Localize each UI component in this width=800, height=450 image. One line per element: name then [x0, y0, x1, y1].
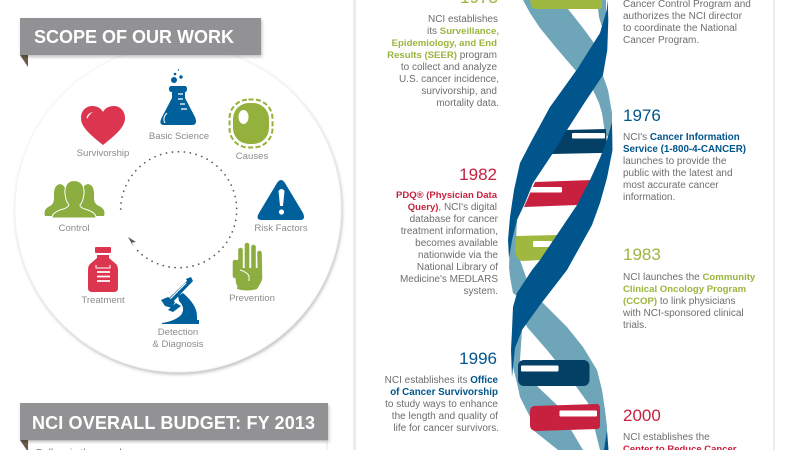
timeline: 1996: the length and quality of [392, 411, 498, 422]
timeline: 1982: becomes available [415, 238, 498, 249]
rung: red upper [524, 180, 592, 207]
timeline: 1996: 1996 [459, 349, 497, 368]
timeline: national cancer program: to coordinate the National [623, 23, 737, 34]
timeline: 1973: survivorship, and [421, 86, 497, 97]
timeline: 1976: public with the latest and [623, 168, 733, 179]
label: treatment: Treatment [81, 295, 125, 306]
label: control: Control [59, 223, 89, 234]
timeline: 1982: Medicine's MEDLARS [400, 274, 498, 285]
cycle arrow [121, 152, 237, 268]
timeline: 1976: 1976 [623, 106, 661, 125]
timeline: 1983: (CCOP) to link physicians [623, 296, 735, 307]
timeline: 1973: its Surveillance, [427, 26, 499, 37]
timeline: 1982: system. [464, 286, 498, 297]
timeline: 1982 [396, 165, 499, 297]
timeline: 1982: Query), NCI's digital [408, 202, 497, 213]
strand: light middle left [509, 220, 530, 300]
icon: survivorship heart [81, 106, 125, 145]
label: causes: Causes [236, 151, 268, 162]
heading: budget [20, 403, 328, 450]
icon: basic science flask [160, 69, 196, 125]
rung: navy upper [552, 129, 607, 154]
timeline: 1982: 1982 [459, 165, 497, 184]
icon: detection microscope [161, 277, 199, 324]
icon: prevention hand [235, 245, 260, 290]
timeline: 1982: National Library of [417, 262, 498, 273]
rung: green lower [515, 235, 558, 261]
timeline: 2000: 2000 [623, 406, 661, 425]
icon: control people [45, 180, 104, 218]
timeline: 1973: NCI establishes [428, 14, 498, 25]
timeline: national cancer program [623, 0, 751, 46]
timeline: 1976: information. [623, 192, 675, 203]
timeline: 1973: to collect and analyze [401, 62, 497, 73]
timeline: 1976 [623, 106, 746, 203]
timeline: 1983: trials. [623, 320, 647, 331]
timeline: 1996: life for cancer survivors. [393, 423, 499, 434]
timeline: 2000: NCI establishes the [623, 432, 710, 443]
label: basic science: Basic Science [149, 131, 209, 142]
label: detection and diagnosis: Detection [158, 327, 198, 338]
timeline: 1982: PDQ® (Physician Data [396, 190, 498, 201]
timeline: 2000 [623, 406, 737, 450]
heading: scope of our work: SCOPE OF OUR WORK [34, 27, 234, 47]
strand: dark lower [511, 122, 612, 377]
timeline: 1976: Service (1-800-4-CANCER) [623, 144, 746, 155]
strand: light lower left [513, 330, 583, 450]
timeline: 1973: Results (SEER) program [387, 50, 497, 61]
label: survivorship: Survivorship [77, 148, 129, 159]
heading: scope of our work [20, 18, 261, 67]
dna helix [508, 0, 612, 450]
label: detection and diagnosis [152, 327, 204, 350]
icon: risk factors warning [258, 180, 304, 220]
timeline: 1982: nationwide via the [418, 250, 498, 261]
rung: green top [530, 0, 602, 9]
timeline: 1983 [622, 245, 756, 331]
timeline: 1983: with NCI-sponsored clinical [622, 308, 744, 319]
timeline: 1996 [385, 349, 499, 434]
heading: budget: NCI OVERALL BUDGET: FY 2013 [32, 413, 315, 433]
timeline: 1982: treatment information, [401, 226, 498, 237]
strand: dark sliver bottom [604, 430, 608, 450]
timeline: 1996: of Cancer Survivorship [390, 387, 498, 398]
icon: treatment bottle [88, 247, 118, 292]
timeline: 1996: NCI establishes its Office [385, 375, 499, 386]
timeline: 1973: U.S. cancer incidence, [399, 74, 499, 85]
timeline: 1976: launches to provide the [623, 156, 727, 167]
timeline: national cancer program: Cancer Program. [623, 35, 699, 46]
label: risk factors: Risk Factors [254, 223, 308, 234]
rung: red lower [530, 404, 600, 431]
timeline: national cancer program: authorizes the NCI director [623, 11, 743, 22]
label: prevention: Prevention [229, 293, 275, 304]
timeline: 1976: NCI's Cancer Information [623, 132, 740, 143]
strand: dark upper [508, 0, 608, 258]
strand: light lower right [520, 295, 607, 450]
strand: light upper [523, 0, 612, 140]
icon: causes cell [230, 100, 272, 148]
timeline: 1983: Clinical Oncology Program [623, 284, 746, 295]
label: detection and diagnosis: & Diagnosis [152, 339, 204, 350]
timeline: 1982: database for cancer [410, 214, 499, 225]
timeline: 1973: mortality data. [436, 98, 499, 109]
strand: light sliver top right [597, 0, 606, 27]
timeline: 1976: most accurate cancer [623, 180, 719, 191]
timeline: 1973 [387, 0, 499, 109]
timeline: 1983: 1983 [623, 245, 661, 264]
timeline: 1983: NCI launches the Community [623, 272, 756, 283]
timeline: 1996: to study ways to enhance [385, 399, 498, 410]
panel: scope circle [15, 46, 341, 372]
timeline: 1973: Epidemiology, and End [392, 38, 497, 49]
rung: navy lower [518, 360, 590, 386]
